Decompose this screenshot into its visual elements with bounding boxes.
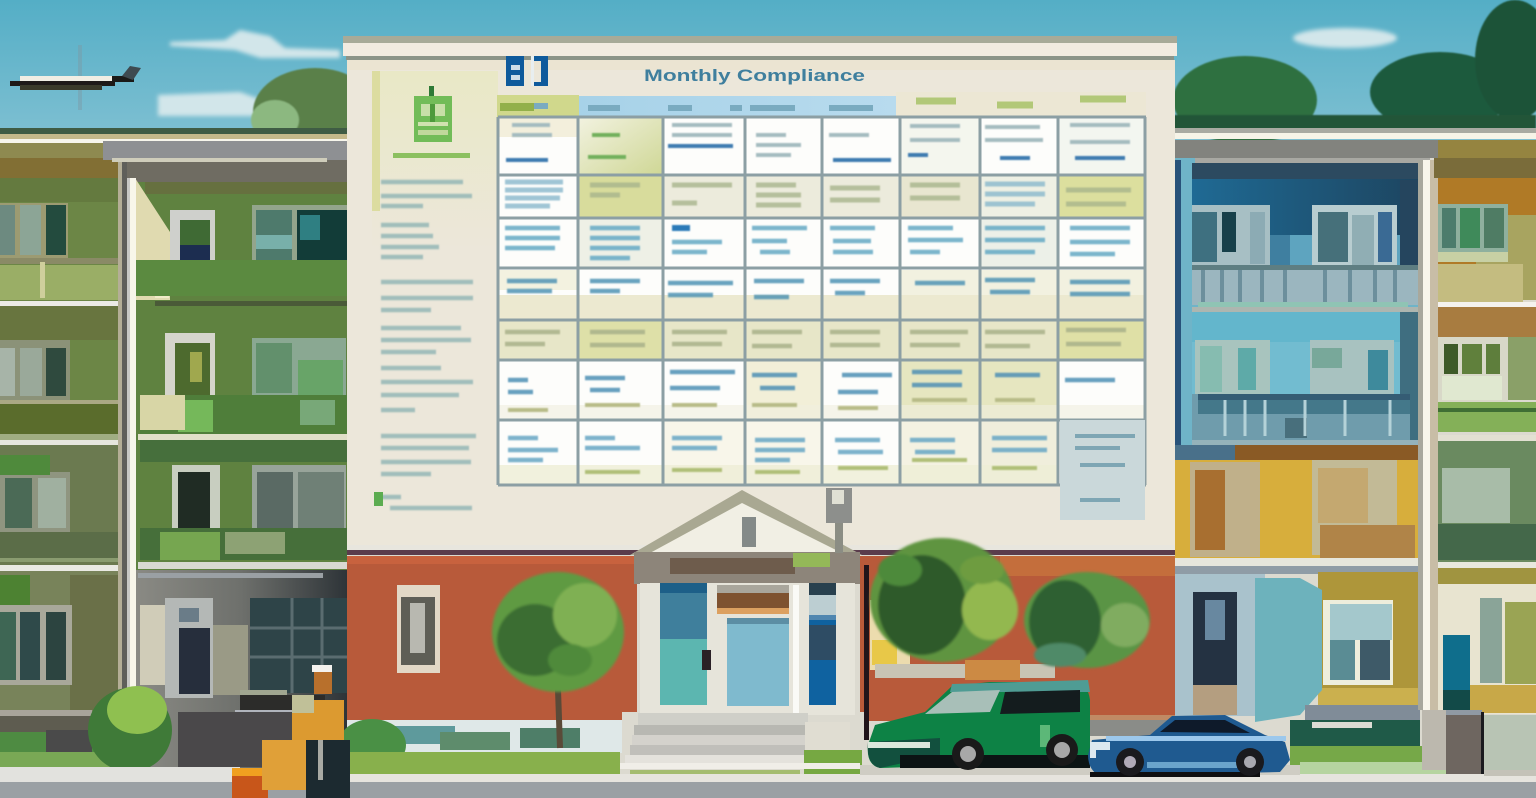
right building: ground floor: [1175, 566, 1420, 722]
right door: [809, 583, 836, 705]
sidebar panel: [372, 71, 498, 521]
title: Monthly Compliance: [644, 66, 865, 85]
compliance table: [497, 92, 1146, 520]
person with cart: [232, 665, 350, 798]
logo: [506, 56, 548, 86]
row 3 lines: [505, 228, 1130, 258]
airplane: [10, 45, 141, 110]
lintel: [634, 552, 860, 584]
entrance base: [622, 712, 867, 770]
table text lines: [505, 125, 1131, 472]
center door: [717, 585, 789, 593]
sidebar green marker: [374, 492, 383, 506]
left door: [660, 583, 707, 705]
entrance portico: [622, 490, 867, 774]
right building: blue section: [1175, 140, 1450, 570]
clouds: [158, 28, 1397, 116]
tree: left of entrance: [492, 572, 624, 748]
row 5 lines: [505, 330, 1126, 346]
left building: main wing: [103, 141, 348, 770]
green car: [868, 680, 1090, 770]
table cell backgrounds: [498, 117, 1146, 485]
left building: white column: [118, 162, 136, 768]
right building: white column: [1418, 160, 1438, 710]
sidebar text lines: [381, 182, 476, 508]
right pillar box: [1422, 710, 1484, 774]
blue car: [1088, 715, 1290, 777]
lamp post: [826, 488, 852, 553]
brick lower wall: [347, 556, 1175, 736]
grey callout box: [1060, 420, 1145, 520]
pediment: [630, 490, 862, 555]
icon: green clipboard: [414, 86, 452, 142]
central building panel: [343, 36, 1177, 555]
table grid lines: [498, 117, 1146, 485]
left building: [0, 128, 348, 772]
teal foliage panel: [1255, 578, 1322, 722]
wall: [347, 60, 1175, 552]
ground: [0, 752, 1536, 798]
door frames: [640, 583, 855, 715]
trees behind buildings: [251, 0, 1536, 156]
right building: [1172, 128, 1536, 777]
black pole: [864, 565, 869, 740]
row 4 lines: [507, 280, 1130, 297]
row 1 lines: [512, 125, 1130, 155]
sidebar heading bar: [393, 153, 470, 158]
row 2 lines: [505, 182, 1045, 206]
shrub strip: [338, 719, 632, 771]
row 1 accents: [506, 146, 1125, 160]
tree: right small: [1024, 572, 1150, 668]
right building: outer wing: [1434, 140, 1536, 770]
left building: outer wing: [0, 128, 347, 770]
row 6 lines: [508, 372, 1115, 392]
row 1 green accents: [588, 135, 626, 157]
right building: yellow section: [1175, 445, 1420, 566]
row 7 lines: [508, 438, 1047, 460]
brick wall window: [397, 585, 440, 673]
roof cap: [343, 36, 1177, 60]
steps: [625, 713, 810, 763]
table header row: [497, 92, 1146, 117]
sky background: [0, 0, 1536, 140]
shrub: [88, 686, 172, 772]
tree: right large: [870, 538, 1018, 662]
right building: garden: [1290, 720, 1480, 777]
